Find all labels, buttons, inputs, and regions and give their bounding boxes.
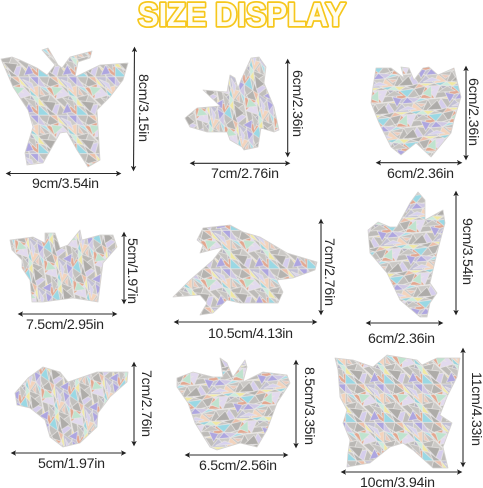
width label 4: 7.5cm/2.95in	[26, 317, 104, 333]
height arrow 2	[287, 60, 289, 156]
height arrow 3	[465, 67, 467, 159]
height label 3: 6cm/2.36in	[465, 78, 481, 146]
height label 1: 8cm/3.15in	[135, 74, 151, 142]
width arrow 8	[186, 454, 287, 456]
sticker shape 1	[1, 48, 128, 167]
width arrow 6	[367, 322, 442, 324]
butterfly 9: 10cm by 11cm	[335, 349, 483, 488]
sticker shape 2	[185, 57, 279, 150]
butterfly 6: 6cm by 9cm	[367, 192, 475, 347]
width arrow 5	[175, 321, 316, 323]
height arrow 8	[295, 361, 297, 447]
height arrow 7	[133, 363, 135, 445]
height label 5: 7cm/2.76in	[321, 238, 337, 306]
butterfly 7: 5cm by 7cm	[12, 363, 154, 472]
width arrow 3	[377, 162, 461, 164]
width arrow 4	[19, 313, 116, 315]
width label 2: 7cm/2.76in	[211, 166, 279, 182]
width arrow 7	[12, 452, 125, 454]
sticker shape 7	[15, 367, 128, 447]
height label 4: 5cm/1.97in	[124, 238, 140, 304]
sticker shape 4	[10, 230, 117, 302]
height arrow 6	[455, 192, 457, 314]
width label 5: 10.5cm/4.13in	[208, 326, 293, 342]
width label 3: 6cm/2.36in	[387, 166, 454, 182]
butterfly 1: 9cm by 8cm	[1, 48, 151, 192]
butterfly 8: 6.5cm by 8.5cm	[177, 358, 317, 474]
width label 7: 5cm/1.97in	[38, 456, 105, 472]
height arrow 5	[320, 220, 322, 314]
butterfly 4: 7.5cm by 5cm	[10, 230, 140, 333]
sticker shape 8	[177, 358, 290, 450]
sticker shape 9	[335, 355, 460, 468]
width arrow 1	[7, 172, 120, 174]
height label 6: 9cm/3.54in	[459, 218, 475, 285]
sticker shape 5	[173, 225, 317, 315]
width label 6: 6cm/2.36in	[368, 331, 435, 347]
height arrow 9	[462, 349, 464, 466]
sticker shape 3	[371, 67, 461, 157]
height arrow 4	[123, 233, 125, 303]
height label 2: 6cm/2.36in	[289, 70, 305, 137]
height label 7: 7cm/2.76in	[138, 370, 154, 437]
width arrow 2	[191, 162, 289, 164]
width label 1: 9cm/3.54in	[32, 176, 99, 192]
height arrow 1	[134, 48, 135, 170]
width arrow 9	[342, 471, 461, 473]
width label 8: 6.5cm/2.56in	[199, 458, 277, 474]
butterfly 3: 6cm by 6cm	[371, 67, 481, 182]
height label 8: 8.5cm/3.35in	[301, 367, 317, 445]
sticker shape 6	[368, 192, 445, 317]
butterfly 2: 7cm by 6cm	[185, 57, 305, 182]
butterfly 5: 10.5cm by 7cm	[173, 220, 337, 342]
